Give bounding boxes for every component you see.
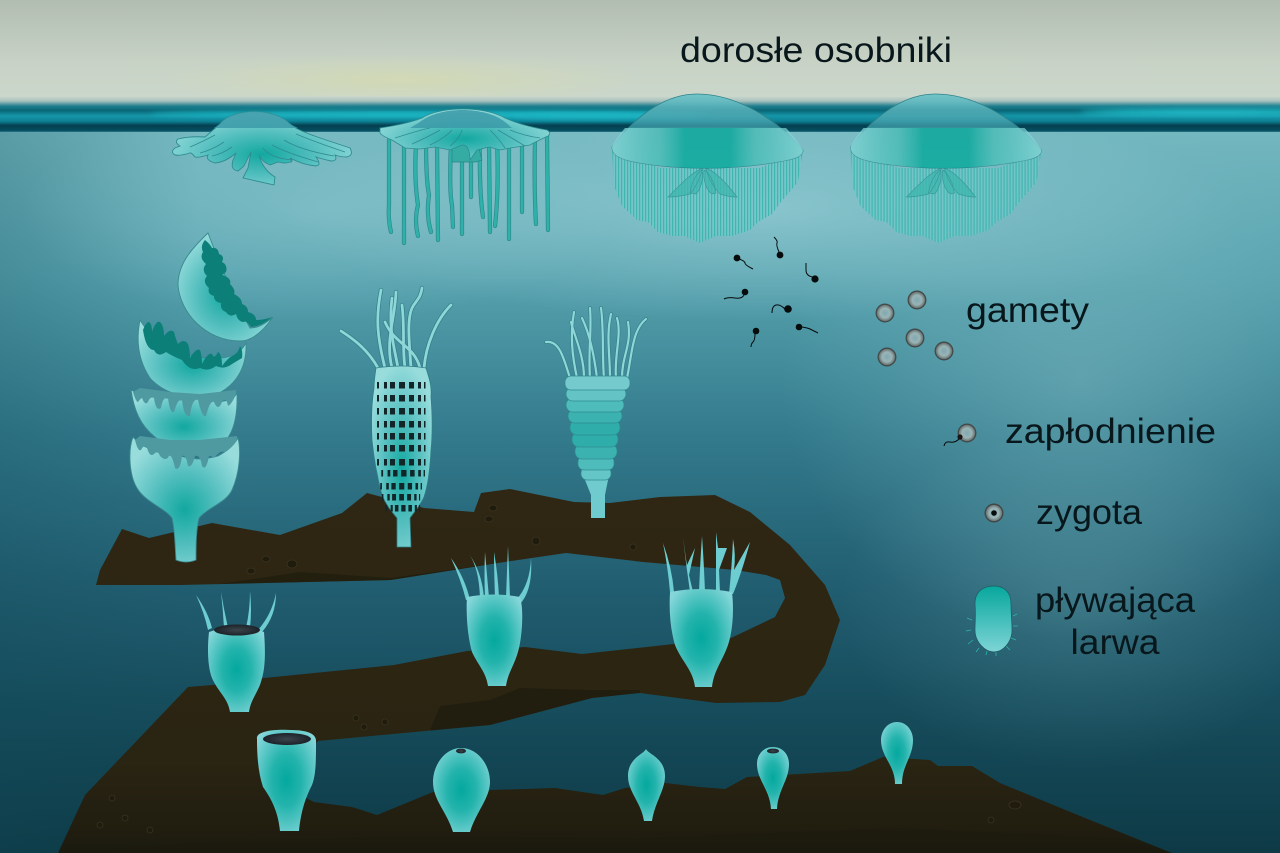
rock seabed — [58, 489, 1172, 853]
title: adult specimens: dorosłe osobniki — [680, 31, 952, 70]
young jellyfish: with long tentacles — [380, 109, 550, 243]
settled planula — [881, 722, 913, 784]
label: gametes: gamety — [966, 291, 1090, 330]
label: swimming larva: larwa — [1070, 623, 1160, 662]
icon: zygote — [985, 504, 1003, 522]
ephyra second — [138, 320, 246, 398]
label: fertilization: zapłodnienie — [1005, 412, 1216, 451]
label: zygote: zygota — [1036, 493, 1143, 532]
polyp with stacked discs — [546, 308, 646, 518]
young polyp with opening — [757, 747, 789, 809]
horizon band — [0, 96, 1280, 132]
adult jellyfish 2 — [850, 94, 1042, 243]
polyp with many tentacles — [663, 532, 750, 687]
young jellyfish: flat ephyra — [172, 112, 351, 185]
young polyp with pointed tip — [628, 749, 665, 821]
egg cells — [876, 291, 953, 366]
sperm cells — [724, 237, 819, 347]
polyp with six tentacles — [451, 546, 531, 686]
strobilating polyp with segmented body — [341, 288, 451, 547]
ephyra third — [131, 388, 237, 453]
young polyp with small mouth — [433, 748, 490, 832]
sky — [0, 0, 1280, 106]
polyp base — [130, 436, 240, 562]
label: swimming larva: pływająca — [1035, 581, 1196, 620]
separating ephyra — [178, 233, 273, 341]
adult jellyfish 1 — [612, 94, 803, 243]
cup polyp with open mouth — [257, 730, 316, 831]
strobila stack with ephyrae — [130, 233, 273, 562]
icon: swimming larva — [966, 586, 1018, 656]
icon: fertilization — [944, 424, 976, 446]
polyp with four tentacles and open mouth — [196, 591, 276, 712]
